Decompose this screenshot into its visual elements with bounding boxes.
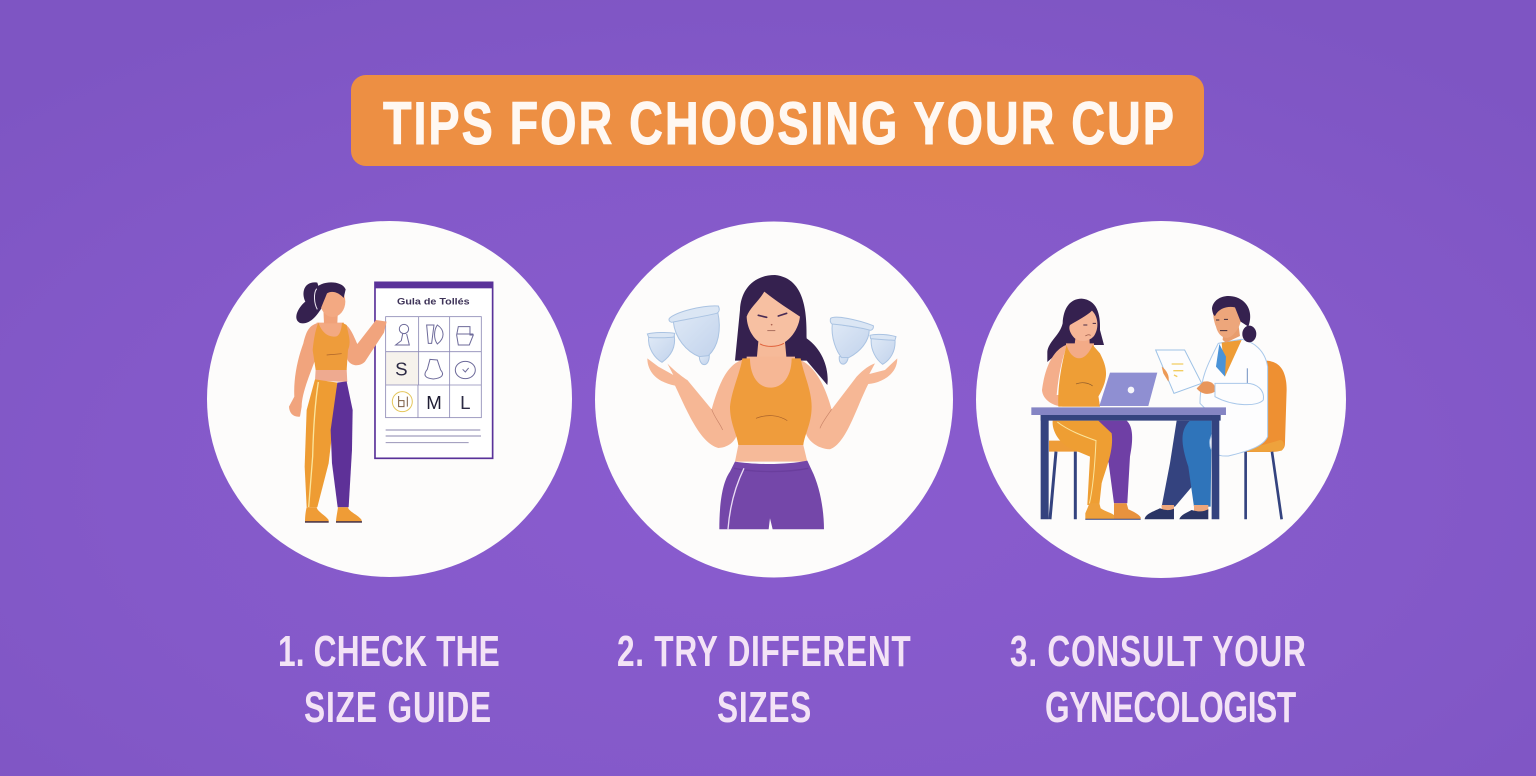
caption 3: 3. CONSULT YOUR bbox=[1010, 627, 1306, 676]
caption 1: SIZE GUIDE bbox=[304, 683, 491, 732]
illustration: woman comparing cups bbox=[647, 275, 897, 529]
illustration: woman pointing at size chart bbox=[289, 282, 493, 523]
right chair bbox=[1238, 361, 1287, 519]
illustration: consultation at table bbox=[1031, 296, 1287, 519]
panel: try different sizes bbox=[595, 222, 953, 578]
table bbox=[1031, 407, 1226, 519]
icon: small cup right bbox=[870, 334, 896, 364]
size chart: S bbox=[395, 359, 408, 380]
size chart: L bbox=[460, 392, 471, 413]
caption 3: GYNECOLOGIST bbox=[1045, 683, 1296, 732]
caption 2: SIZES bbox=[717, 683, 811, 732]
caption 2: 2. TRY DIFFERENT bbox=[617, 627, 911, 676]
laptop bbox=[1099, 373, 1157, 406]
size chart: M bbox=[426, 392, 442, 413]
left chair bbox=[1049, 441, 1087, 519]
size chart bbox=[375, 282, 493, 458]
caption 3 bbox=[1010, 627, 1306, 732]
caption 2 bbox=[617, 627, 911, 732]
caption 1: 1. CHECK THE bbox=[278, 627, 500, 676]
woman figure bbox=[647, 275, 897, 529]
icon: large cup left bbox=[669, 306, 719, 365]
panel: consult your gynecologist bbox=[976, 221, 1346, 578]
patient figure bbox=[1042, 299, 1141, 519]
panel: check the size guide bbox=[207, 221, 572, 577]
caption 1 bbox=[278, 627, 500, 732]
size chart: Gula de Tollés bbox=[397, 296, 470, 306]
icon: large cup right bbox=[830, 317, 873, 364]
woman figure bbox=[289, 282, 387, 523]
title banner: TIPS FOR CHOOSING YOUR CUP bbox=[383, 90, 1174, 157]
title banner bbox=[351, 75, 1204, 166]
doctor figure bbox=[1145, 296, 1268, 519]
icon: small cup left bbox=[647, 332, 675, 362]
